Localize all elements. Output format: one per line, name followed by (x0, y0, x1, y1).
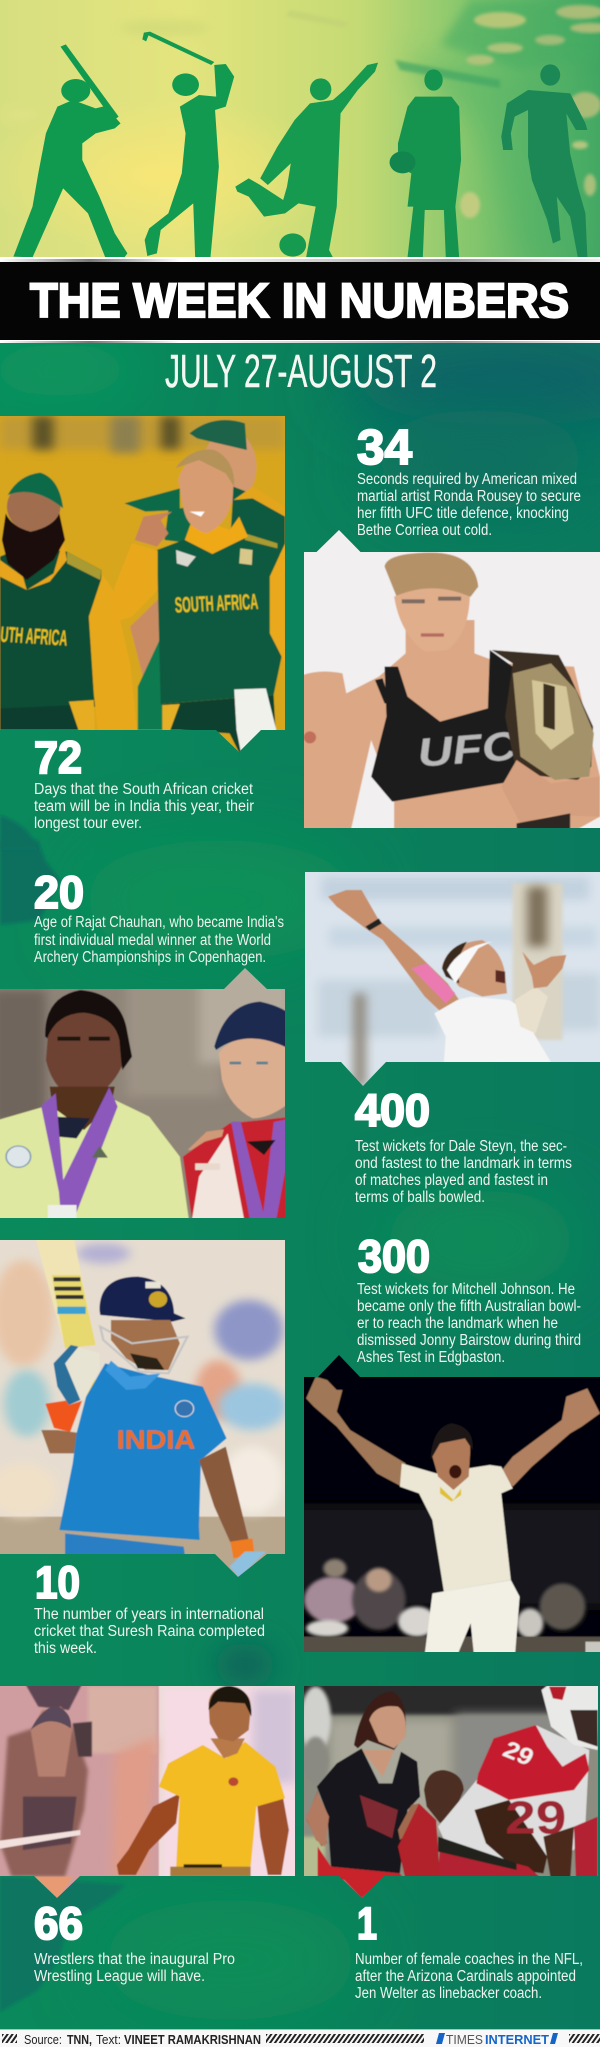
number: 34 (357, 421, 412, 475)
description: Archery Championships in Copenhagen. (34, 949, 266, 966)
description: Wrestling League will have. (34, 1968, 205, 1985)
photo: Mitchell Johnson celebrating (298, 1347, 600, 1660)
description: her fifth UFC title defence, knocking (357, 505, 569, 522)
title: THE WEEK IN NUMBERS (30, 275, 569, 328)
panel: 300 Mitchell Johnson (298, 1231, 600, 1660)
panel: 66 wrestlers (0, 1680, 304, 1985)
source credit: Text: (96, 2033, 121, 2047)
description: The number of years in international (34, 1606, 264, 1623)
description (34, 1951, 235, 1985)
description (34, 1606, 265, 1657)
description: Bethe Corriea out cold. (357, 522, 492, 539)
panel: 72 South African cricket (0, 410, 293, 832)
photo: archers with medals (0, 968, 285, 1218)
description: Ashes Test in Edgbaston. (357, 1349, 505, 1366)
panel: 1 female NFL coach (298, 1680, 600, 2002)
description: Jen Welter as linebacker coach. (355, 1985, 542, 2002)
panel: 10 Suresh Raina (0, 1233, 293, 1657)
photo: Jen Welter with Arizona Cardinals: 29 (505, 1792, 566, 1844)
description: Age of Rajat Chauhan, who became India's (34, 914, 284, 931)
photo: Ronda Rousey with belt (298, 523, 600, 837)
title band (0, 257, 600, 343)
description (34, 781, 254, 832)
description: this week. (34, 1640, 97, 1657)
silhouette: basketball player (390, 69, 461, 257)
panel: 400 Dale Steyn (298, 867, 600, 1206)
description: ond fastest to the landmark in terms (355, 1155, 572, 1172)
description: Wrestlers that the inaugural Pro (34, 1951, 235, 1968)
photo: South Africa cricketers: UTH AFRICA (0, 623, 68, 651)
description (355, 1138, 572, 1206)
date heading: JULY 27-AUGUST 2 (165, 345, 437, 397)
number: 1 (357, 1898, 377, 1949)
number: 72 (34, 732, 82, 783)
photo: Suresh Raina raising bat: INDIA (117, 1425, 195, 1454)
silhouette: runner (501, 64, 587, 257)
number: 66 (34, 1898, 83, 1949)
photo: Ronda Rousey with belt: UFC (415, 724, 520, 776)
photo: South Africa cricketers: SOUTH AFRICA (174, 590, 259, 618)
description: team will be in India this year, their (34, 798, 254, 815)
description: longest tour ever. (34, 815, 142, 832)
number: 10 (35, 1557, 80, 1608)
footer credit strip (0, 2029, 600, 2047)
logo: Times Internet: TIMES (446, 2032, 483, 2047)
number: 300 (358, 1231, 430, 1282)
description (357, 471, 581, 539)
photo: Suresh Raina raising bat (0, 1233, 293, 1587)
number: 20 (34, 867, 84, 918)
description: cricket that Suresh Raina completed (34, 1623, 265, 1640)
source credit: Source: (24, 2033, 62, 2047)
silhouette: footballer with ball (235, 63, 378, 257)
panel: 20 Rajat Chauhan (0, 867, 293, 1227)
source credit (24, 2033, 261, 2047)
silhouette: golfer (142, 32, 234, 257)
description: terms of balls bowled. (355, 1189, 485, 1206)
description: Days that the South African cricket (34, 781, 254, 798)
description: Test wickets for Dale Steyn, the sec- (355, 1138, 567, 1155)
source credit: VINEET RAMAKRISHNAN (124, 2033, 261, 2047)
description: er to reach the landmark when he (357, 1315, 558, 1332)
photo: Sushil Kumar with gladiator artwork (0, 1680, 304, 1907)
logo: Times Internet (436, 2032, 558, 2047)
description (357, 1281, 581, 1366)
logo: Times Internet: INTERNET (485, 2032, 549, 2047)
description (34, 914, 284, 966)
panel: 34 Ronda Rousey (298, 421, 600, 837)
header banner with sport silhouettes (0, 0, 600, 258)
photo: South Africa cricketers (0, 410, 293, 757)
photo: Jen Welter with Arizona Cardinals (298, 1680, 600, 1907)
silhouette: batter (13, 44, 127, 257)
description (355, 1951, 583, 2002)
photo: Jen Welter with Arizona Cardinals: 29 (499, 1736, 538, 1771)
photo: Dale Steyn appealing (298, 867, 600, 1090)
description: of matches played and fastest in (355, 1172, 548, 1189)
description: first individual medal winner at the World (34, 932, 271, 949)
number: 400 (355, 1085, 430, 1136)
paint splatters (2, 0, 600, 258)
source credit: TNN, (67, 2033, 92, 2047)
silhouettes (13, 32, 587, 257)
